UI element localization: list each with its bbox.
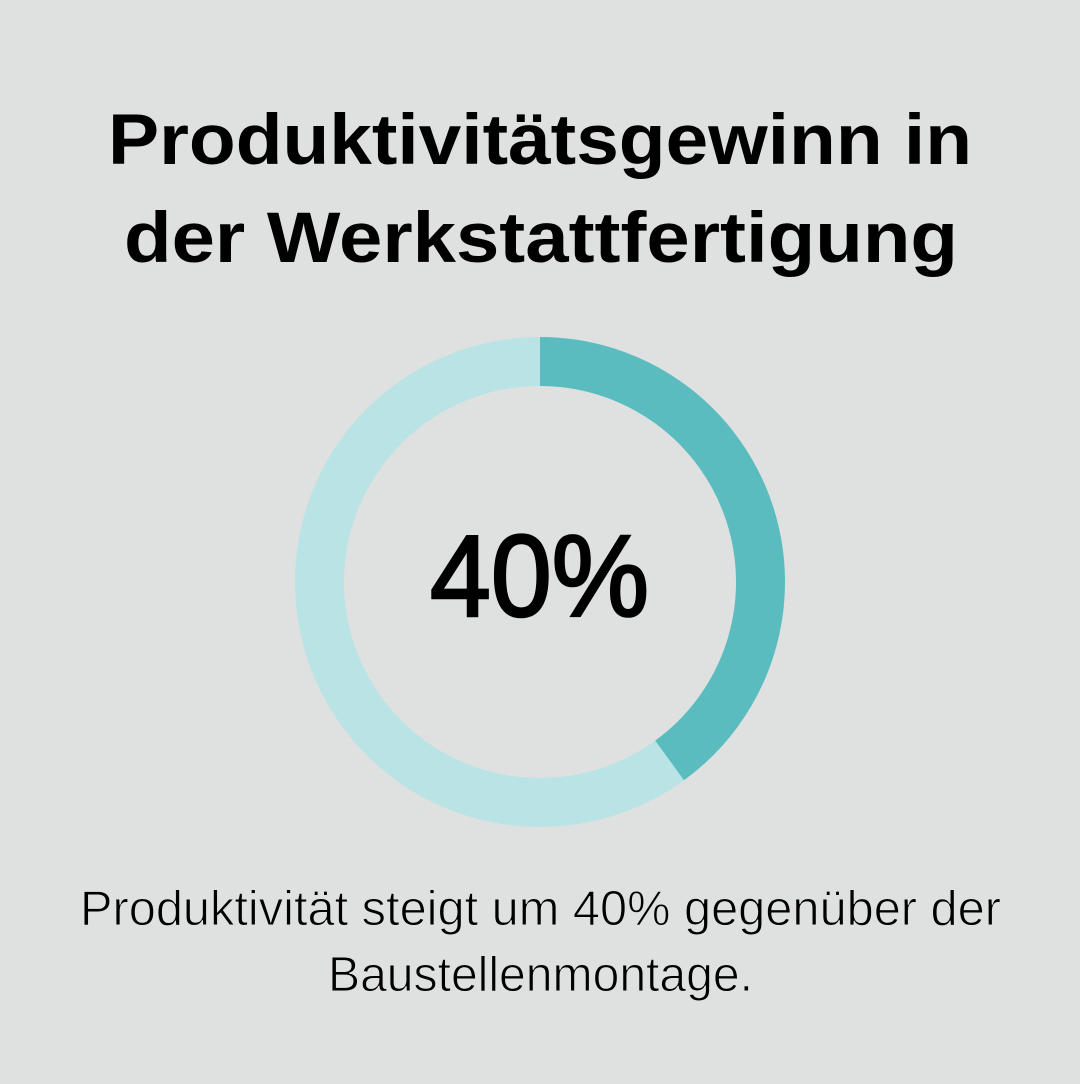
description: Baustellenmontage. bbox=[328, 948, 753, 1002]
title: Produktivitätsgewinn in bbox=[108, 101, 972, 180]
description: Produktivität steigt um 40% gegenüber der bbox=[80, 882, 1001, 936]
title bbox=[108, 101, 972, 278]
center value: 40% bbox=[430, 511, 649, 641]
description bbox=[80, 882, 1001, 1002]
donut value arc bbox=[540, 362, 761, 760]
donut track bbox=[320, 362, 760, 802]
title: der Werkstattfertigung bbox=[124, 199, 958, 278]
donut chart: 40% bbox=[320, 362, 761, 802]
